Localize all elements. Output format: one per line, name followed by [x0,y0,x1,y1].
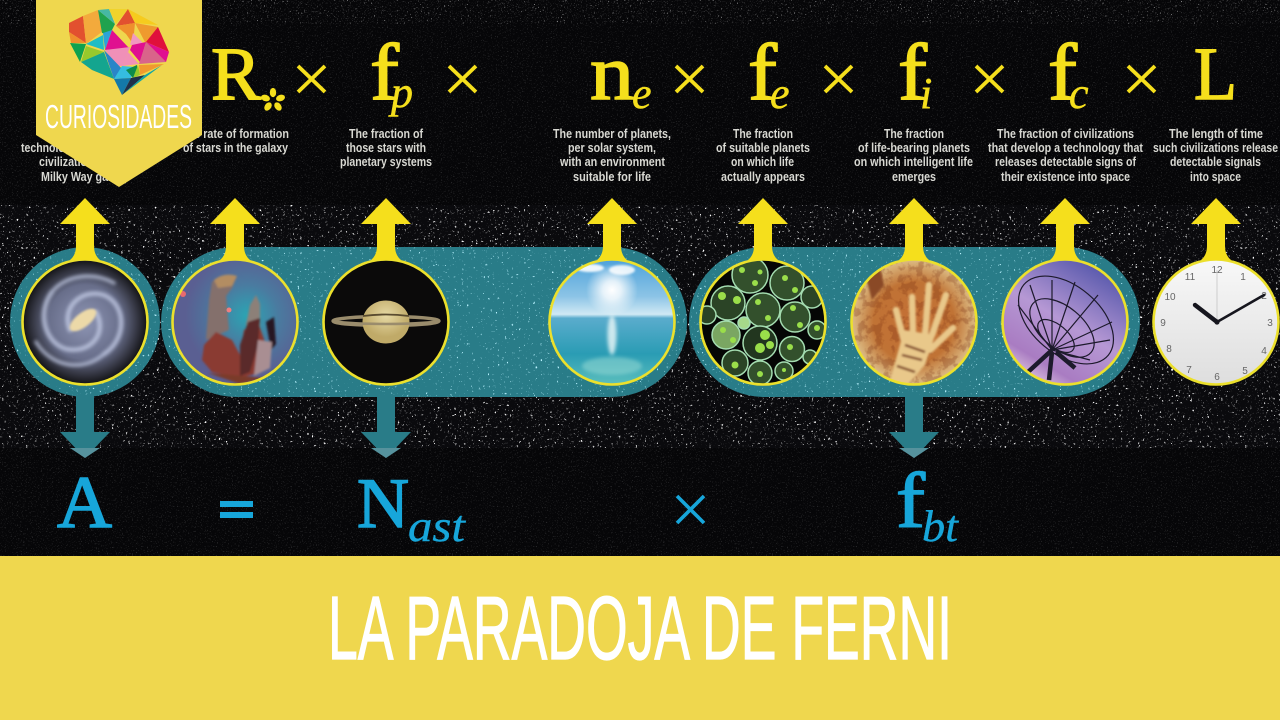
arrow: yellow up fe [738,198,788,260]
symbol f_c: c [1069,69,1089,118]
arrow: yellow up L [1191,198,1241,260]
text block: fe description: actually appears [721,169,805,184]
image: clock: 3 [1267,318,1273,329]
arrow: yellow up fi [889,198,939,260]
text block: R description: The rate of formation [181,126,289,141]
symbol n_e [590,29,652,118]
symbol N_ast: N [357,465,409,543]
arrow: yellow up ne [587,198,637,260]
symbol f_bt [896,457,960,551]
text block: L description: The length of time [1169,126,1263,141]
text block: fi description: The fraction [884,126,944,141]
panel: teal groupings [10,247,1140,397]
text block: A description: civilizations in the [39,154,131,169]
symbol f_c [1048,29,1089,118]
multiplication sign [677,496,704,523]
image: clock: 6 [1214,372,1220,383]
symbol n_e: n [590,29,634,116]
text block: fc description: The fraction of civilizations [997,126,1134,141]
image: clock: 12 [1211,265,1223,276]
text block: A description: technologically advanced [21,140,149,155]
text block: fp description: those stars with [346,140,426,155]
icon: polygon brain [69,9,169,95]
image: radio telescope dish [1002,259,1130,384]
image: clock: 2 [1261,291,1267,302]
symbol f_p [370,29,413,117]
arrow: yellow up fp [361,198,411,260]
text block: fe description: of suitable planets [716,140,810,155]
symbol f_p: p [388,68,413,117]
text block: L description: into space [1190,169,1241,184]
text block: fi description: on which intelligent life [854,154,973,169]
image: ocean and sun [548,258,678,386]
footer band [0,556,1280,720]
arrow: yellow up R [210,198,260,260]
arrow: teal down fbt [889,395,939,458]
symbol f_bt: bt [922,502,960,551]
symbol f_e [748,29,790,118]
text block: fe description: on which life [731,154,794,169]
text block: ne description: The number of planets, [553,126,671,141]
text block: fc description: their existence into space [1001,169,1130,184]
text block: R description: of stars in the galaxy [183,140,289,155]
symbol f_bt: f [896,457,925,544]
image: Milky Way galaxy [22,259,148,385]
image: clock [1154,260,1278,384]
image: clock: 7 [1186,365,1192,376]
image: cave hand painting [852,260,976,388]
arrow: yellow up fc [1040,198,1090,260]
image: green cells [698,257,826,385]
image: Saturn [324,260,448,384]
text block: fe description: The fraction [733,126,793,141]
text block: fp description: The fraction of [349,126,424,141]
text block: L description: detectable signals [1170,154,1261,169]
symbol f_p: f [370,29,399,117]
arrow: yellow up A [60,198,110,260]
text block: fc description: that develop a technology that [988,140,1144,155]
symbol f_e: e [770,69,790,118]
text block: ne description: per solar system, [568,140,656,155]
image: clock: 1 [1240,272,1246,283]
text block: fi description: emerges [892,169,936,184]
panel: top equation symbols [211,29,1237,118]
logo banner [36,0,202,187]
symbol N_ast [357,465,467,551]
multiplication signs [298,66,1155,92]
symbol f_i: i [920,69,932,118]
image: clock: 10 [1164,292,1176,303]
text block: ne description: with an environment [559,154,666,169]
text block: fc description: releases detectable signs of [995,154,1137,169]
symbol L: L [1194,33,1237,116]
equals sign [220,501,253,518]
image: clock: 11 [1185,272,1196,283]
text block: fp description: planetary systems [340,154,432,169]
starry background [0,0,1280,556]
image: clock: 8 [1166,344,1172,355]
text block: A description: Milky Way galaxy [41,169,130,184]
arrow: teal down Nast [361,395,411,458]
text block: A description: The number of [50,126,121,141]
arrow: teal down A [60,395,110,458]
panel: lower equation [57,457,960,551]
text block: ne description: suitable for life [573,169,651,184]
image: clock: 4 [1261,346,1267,357]
symbol R star [211,33,286,116]
image: Pillars of Creation [172,260,298,384]
symbol N_ast: ast [408,502,467,551]
logo wordmark: CURIOSIDADES [45,98,192,135]
symbol A: A [57,462,112,544]
symbol n_e: e [632,69,652,118]
symbol f_e: f [748,29,777,117]
text block: fi description: of life-bearing planets [858,140,970,155]
symbol R star: R [211,33,261,116]
symbol f_c: f [1048,29,1077,117]
image: clock: 9 [1160,318,1166,329]
symbol f_i: f [898,29,927,117]
image: clock: 5 [1242,366,1248,377]
